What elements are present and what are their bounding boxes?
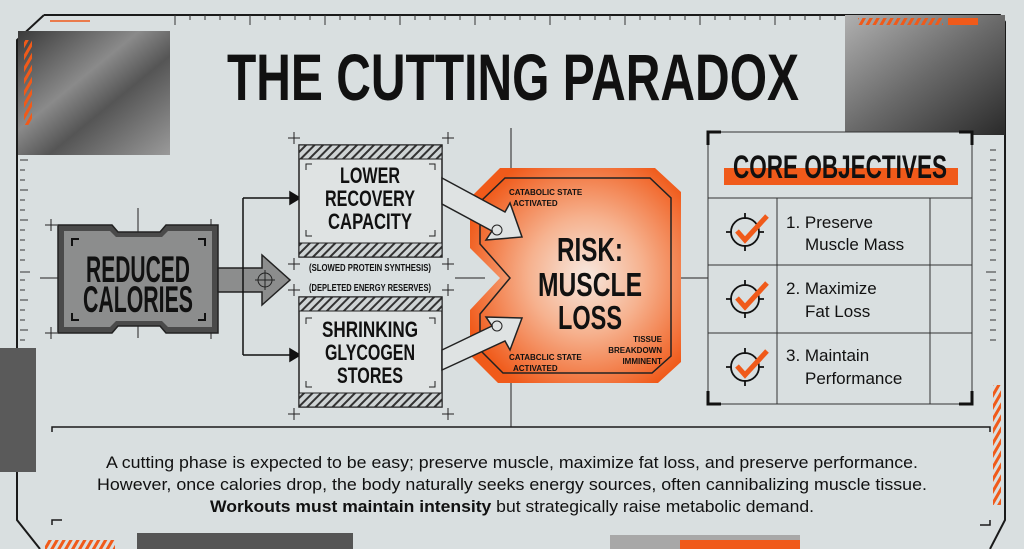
panel: core objectives <box>708 132 972 404</box>
box: lower recovery capacity <box>299 145 442 257</box>
box: lower recovery capacity: RECOVERY <box>325 186 415 211</box>
risk: muscle loss: LOSS <box>558 299 622 336</box>
arrow: glycogen to risk <box>442 317 522 370</box>
row 2: Fat Loss <box>805 302 870 321</box>
summary text: However, once calories drop, the body naturally seeks energy sources, often cannibalizing muscle tissue. <box>97 475 927 494</box>
risk: muscle loss: RISK: <box>557 231 623 268</box>
risk: muscle loss: CATABOLIC STATE <box>509 188 583 197</box>
label: slowed protein synthesis: (SLOWED PROTEIN SYNTHESIS) <box>309 263 431 274</box>
row 2 <box>726 279 877 321</box>
row 2: 2. Maximize <box>786 279 877 298</box>
risk: muscle loss: TISSUE <box>633 335 663 344</box>
reduced calories box: REDUCED <box>86 249 190 290</box>
row 3 <box>726 346 902 388</box>
row 1 <box>726 213 904 254</box>
box: lower recovery capacity: LOWER <box>340 163 400 188</box>
row 1: 1. Preserve <box>786 213 873 232</box>
reduced calories box <box>58 225 218 333</box>
risk: muscle loss: ACTIVATED <box>513 364 558 373</box>
risk: muscle loss: MUSCLE <box>538 266 642 303</box>
row 1: Muscle Mass <box>805 235 904 254</box>
ruler top <box>20 15 996 340</box>
photo: top-right <box>845 15 1005 135</box>
box: shrinking glycogen stores: STORES <box>337 363 403 388</box>
arrow: calories to effects <box>218 255 290 305</box>
photo: bottom <box>137 533 353 549</box>
crosshair guide lines <box>40 128 708 427</box>
photo: left <box>0 348 36 472</box>
box: shrinking glycogen stores <box>299 297 442 407</box>
reduced calories box: CALORIES <box>83 279 193 320</box>
summary text <box>97 453 927 516</box>
risk: muscle loss: BREAKDOWN <box>608 346 662 355</box>
arrow: recovery to risk <box>442 178 522 240</box>
risk: muscle loss: ACTIVATED <box>513 199 558 208</box>
title: THE CUTTING PARADOX <box>227 40 799 114</box>
label: depleted energy reserves: (DEPLETED ENERGY RESERVES) <box>309 283 431 294</box>
risk: muscle loss <box>470 168 681 383</box>
risk: muscle loss: CATABCLIC STATE <box>509 353 582 362</box>
box: shrinking glycogen stores: SHRINKING <box>322 317 418 342</box>
orange accents <box>858 18 943 25</box>
summary text: Workouts must maintain intensity but strategically raise metabolic demand. <box>210 497 814 516</box>
box: lower recovery capacity: CAPACITY <box>328 209 412 234</box>
photo: top-left <box>18 31 170 155</box>
risk: muscle loss: IMMINENT <box>622 357 662 366</box>
box: shrinking glycogen stores: GLYCOGEN <box>325 340 415 365</box>
connector branches <box>243 192 300 361</box>
summary text: A cutting phase is expected to be easy; preserve muscle, maximize fat loss, and preserve performance. <box>106 453 918 472</box>
row 3: 3. Maintain <box>786 346 869 365</box>
row 3: Performance <box>805 369 902 388</box>
